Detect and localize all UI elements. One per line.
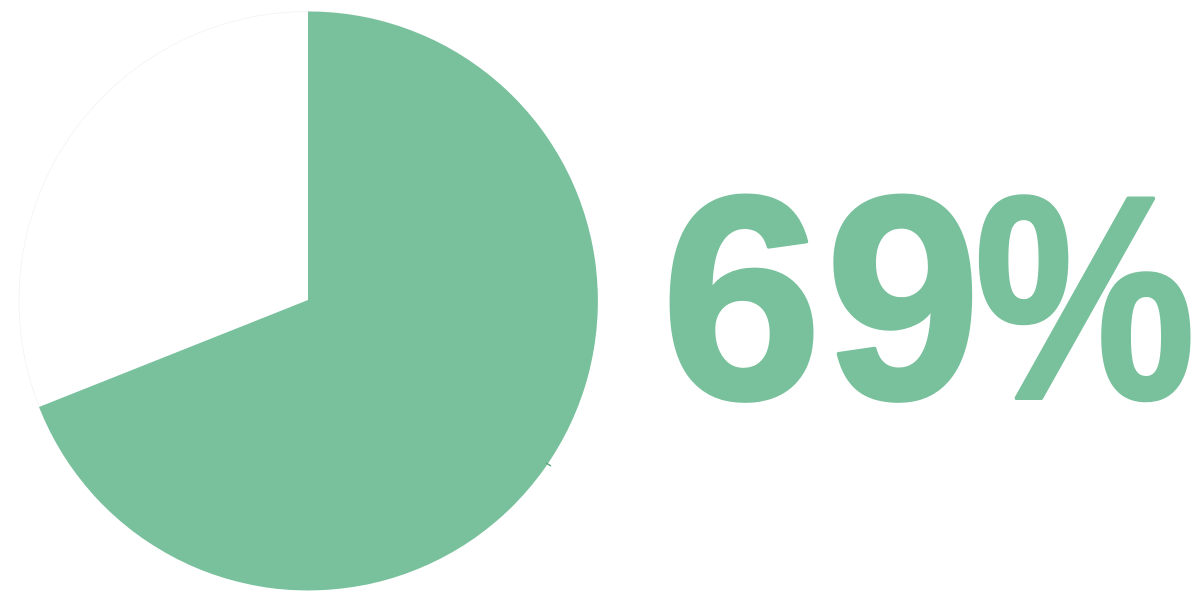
percentage figure: 6 bbox=[661, 136, 822, 460]
pie chart bbox=[19, 11, 598, 590]
percentage figure bbox=[661, 136, 1195, 460]
pie remainder slice bbox=[19, 12, 597, 590]
small tick on pie edge bbox=[546, 463, 551, 466]
percentage figure: 9 bbox=[826, 136, 981, 460]
pie 69 percent slice bbox=[39, 11, 598, 590]
